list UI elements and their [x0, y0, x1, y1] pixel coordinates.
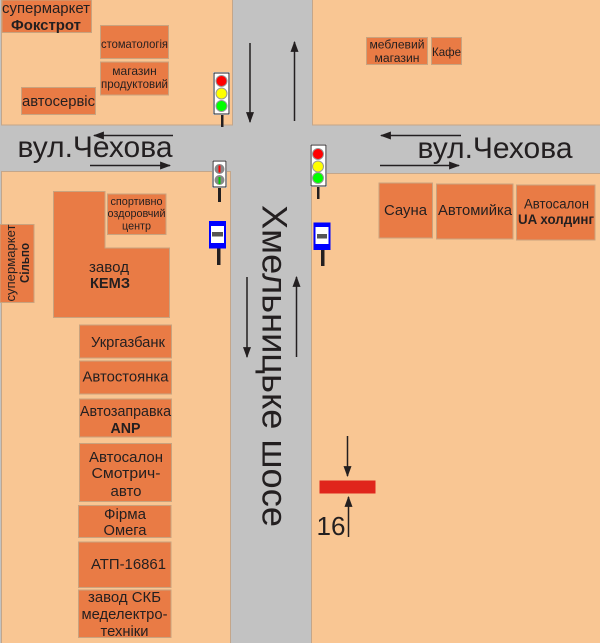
building: SKB medelektrotekhnika plant: меделектро-	[82, 606, 168, 623]
building: cafe: Кафе	[432, 45, 461, 59]
building: ANP filling station: Автозаправка	[80, 404, 172, 420]
building: supermarket Silpo: супермаркет	[3, 224, 18, 302]
building: Smotrych-avto dealership: Смотрич-	[92, 465, 161, 482]
building: ANP filling station	[80, 399, 172, 437]
building: dentistry	[100, 26, 168, 58]
arrows: traffic directions	[90, 42, 461, 537]
building: KEMZ plant	[54, 192, 170, 318]
building: sports centre: оздоровчий	[108, 208, 166, 220]
building: grocery store: продуктовий	[101, 79, 168, 91]
panel: top-left block	[2, 0, 232, 125]
building: Ukrgasbank	[80, 325, 172, 358]
building: car park	[80, 361, 172, 394]
building: supermarket Foxtrot: Фокстрот	[11, 17, 81, 34]
building: car wash: Автомийка	[438, 203, 513, 219]
building: car dealership UA holding	[516, 185, 595, 240]
building: Omega firm: Омега	[104, 522, 147, 539]
building: sauna: Сауна	[384, 203, 428, 219]
building: furniture store: меблевий	[370, 40, 424, 52]
distance label: 16: 16	[316, 511, 346, 541]
panel: bottom-left block	[2, 172, 230, 643]
building: SKB medelektrotekhnika plant: техніки	[100, 623, 148, 640]
traffic light: pedestrian, lower-left	[212, 160, 227, 202]
building: ANP filling station: ANP	[110, 421, 141, 437]
building: Smotrych-avto dealership	[80, 444, 172, 502]
building: dentistry: стоматологія	[101, 37, 168, 51]
building: cafe	[432, 38, 462, 64]
building: SKB medelektrotekhnika plant	[78, 589, 171, 640]
building: grocery store	[100, 62, 168, 95]
building: supermarket Silpo	[0, 224, 34, 302]
panel: top-right block	[312, 0, 600, 125]
road block: red bar	[320, 480, 376, 494]
road label: Khmelnytske highway: Хмельницьке шосе	[254, 205, 294, 527]
building: sports centre: центр	[122, 220, 151, 232]
traffic light: right	[310, 144, 327, 199]
building: car service	[22, 88, 96, 114]
building: supermarket Foxtrot: супермаркет	[2, 0, 90, 17]
building: sports centre: спортивно	[110, 196, 162, 208]
bus stop sign: left	[209, 221, 226, 265]
building: Smotrych-avto dealership: Автосалон	[89, 449, 163, 466]
building: ATP-16861: АТП-16861	[91, 557, 166, 573]
traffic light: top-left	[213, 72, 230, 127]
building: car wash	[436, 184, 513, 239]
building: car park: Автостоянка	[82, 368, 169, 386]
building: furniture store	[366, 38, 428, 65]
building: car service: автосервіс	[22, 93, 95, 110]
road label: Chekhova street, right: вул.Чехова	[418, 132, 573, 165]
building: ATP-16861	[78, 542, 171, 588]
building: furniture store: магазин	[374, 53, 420, 65]
building: sauna	[379, 183, 432, 238]
building: sports centre	[108, 194, 166, 234]
building: Ukrgasbank: Укргазбанк	[91, 335, 166, 351]
panel: bottom-right block	[312, 174, 600, 643]
building: Omega firm	[78, 506, 171, 539]
building: car dealership UA holding: UA холдинг	[518, 212, 594, 227]
building: grocery store: магазин	[112, 64, 157, 78]
building: Omega firm: Фірма	[104, 506, 147, 523]
building: supermarket Foxtrot	[2, 0, 92, 34]
building: supermarket Silpo: Сільпо	[18, 243, 32, 283]
building: KEMZ plant: завод	[89, 259, 129, 276]
building: Smotrych-avto dealership: авто	[110, 483, 142, 500]
building: car dealership UA holding: Автосалон	[524, 196, 589, 212]
road label: Chekhova street, left: вул.Чехова	[18, 131, 173, 164]
building: KEMZ plant: КЕМЗ	[90, 275, 130, 292]
building: SKB medelektrotekhnika plant: завод СКБ	[88, 589, 161, 606]
bus stop sign: right	[314, 222, 330, 266]
